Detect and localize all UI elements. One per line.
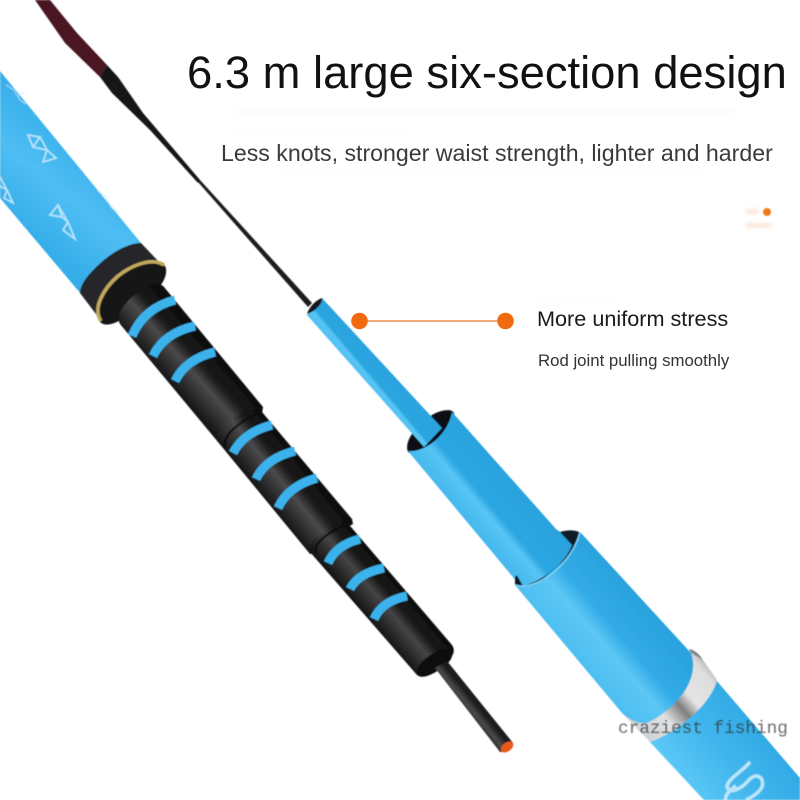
black section three (309, 520, 454, 676)
callout heading: More uniform stress (537, 306, 728, 331)
title: 6.3 m large six-section design (187, 47, 787, 98)
end opening (417, 649, 452, 677)
braided cord (35, 0, 107, 77)
icon: orange dot (763, 208, 771, 216)
orange pin tip (499, 739, 515, 755)
step rims (225, 412, 262, 447)
right orange dot (497, 313, 514, 329)
dark ring shadow (622, 649, 703, 722)
logo on tube (726, 762, 763, 800)
tube one opening (307, 298, 322, 314)
black ferrule (100, 65, 200, 183)
silver ring (622, 652, 717, 742)
black grip sections (119, 284, 515, 755)
tube four (648, 680, 800, 800)
tube two end (515, 530, 572, 586)
left orange dot (351, 313, 368, 329)
blue handle body (0, 71, 141, 294)
subtitle: Less knots, stronger waist strength, lighter and harder (221, 140, 773, 166)
faint ghost marks (235, 108, 735, 303)
thin black line (198, 180, 312, 307)
tube three opening (515, 530, 581, 590)
tube three lip (515, 532, 580, 586)
blue telescoping tubes (307, 298, 800, 800)
tube one (307, 298, 442, 447)
tube three (515, 532, 693, 723)
thin rod tip (35, 0, 312, 307)
dark collar opening (98, 262, 166, 325)
connector line (360, 320, 505, 322)
black section one (119, 284, 263, 447)
blue bands (132, 300, 407, 619)
gold ring (98, 262, 164, 321)
fish pattern (0, 85, 118, 239)
tube two opening (407, 410, 454, 453)
black section two (217, 409, 353, 554)
small decorative sun icon (746, 210, 771, 227)
black collar (80, 243, 166, 322)
blue handle with collar (0, 71, 166, 325)
callout text: Rod joint pulling smoothly (538, 351, 729, 370)
callout connector (351, 313, 514, 329)
black pin (435, 661, 513, 752)
tube two (408, 412, 580, 600)
watermark: craziest fishing (618, 719, 788, 739)
